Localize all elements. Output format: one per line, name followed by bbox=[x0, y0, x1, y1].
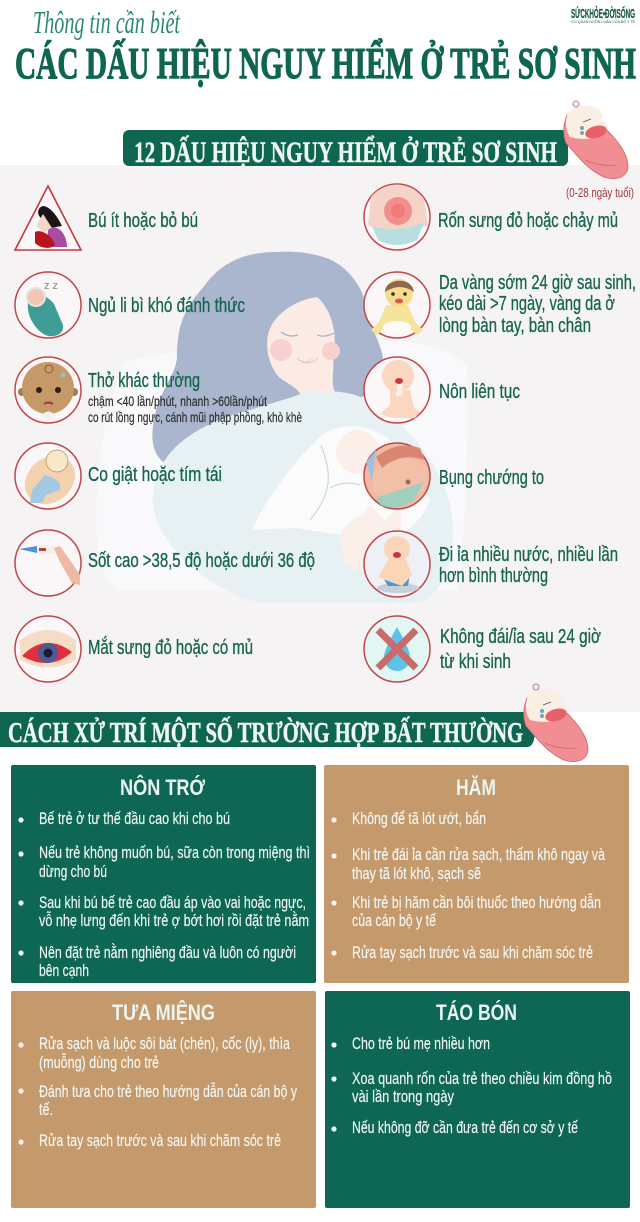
sign 12: no urine bbox=[364, 616, 601, 682]
label: từ khi sinh bbox=[440, 651, 511, 673]
label: Sốt cao >38,5 độ hoặc dưới 36 độ bbox=[88, 550, 315, 572]
logo: Sức khỏe & Đời sống: CƠ QUAN NGÔN LUẬN CỦA BỘ Y TẾ bbox=[571, 19, 635, 24]
sign 1: feeding bbox=[15, 186, 198, 250]
bullets bbox=[18, 1042, 24, 1145]
bullets bbox=[331, 1042, 337, 1132]
heading: TÁO BÓN bbox=[436, 1000, 517, 1025]
label: Thở khác thường bbox=[88, 370, 200, 392]
item text: thay tã lót khô, sạch sẽ bbox=[352, 864, 481, 883]
item text: dừng cho bú bbox=[39, 862, 107, 881]
sign 5: fever bbox=[15, 530, 315, 596]
item text: Nên đặt trẻ nằm nghiêng đầu và luôn có người bbox=[39, 943, 296, 962]
label: Bú ít hoặc bỏ bú bbox=[88, 210, 198, 232]
panel: Nôn trớ bbox=[11, 765, 316, 983]
sign 11: diarrhea bbox=[364, 531, 618, 597]
sign 3: abnormal breathing bbox=[15, 357, 302, 425]
panel: Hăm bbox=[324, 765, 629, 983]
item text: vỗ nhẹ lưng đến khi trẻ ợ bớt hơi rồi đặt trẻ nằm bbox=[39, 911, 309, 930]
sign 4: convulsion bbox=[15, 443, 222, 514]
item text bbox=[352, 809, 605, 962]
item text: Đánh tưa cho trẻ theo hướng dẫn của cán bộ y bbox=[39, 1082, 297, 1101]
icon: swaddled crying baby bbox=[564, 101, 628, 179]
item text: của cán bộ y tế bbox=[352, 911, 436, 930]
heading: NÔN TRỚ bbox=[120, 775, 205, 800]
item text: Cho trẻ bú mẹ nhiều hơn bbox=[352, 1034, 490, 1053]
item text: (muỗng) dùng cho trẻ bbox=[39, 1053, 159, 1072]
sign 7: navel bbox=[364, 184, 618, 250]
item text bbox=[352, 1034, 612, 1137]
sign 2: lethargic sleep: z z bbox=[44, 280, 58, 292]
bullets bbox=[331, 817, 337, 956]
item text: Rửa tay sạch trước và sau khi chăm sóc trẻ bbox=[39, 1131, 281, 1150]
label: Mắt sưng đỏ hoặc có mủ bbox=[88, 636, 253, 659]
icon: swaddled crying baby, lower bbox=[524, 684, 588, 762]
label: Bụng chướng to bbox=[439, 467, 544, 489]
item text: tế. bbox=[39, 1100, 53, 1119]
label: hơn bình thường bbox=[439, 565, 548, 587]
sign 2: lethargic sleep bbox=[15, 272, 245, 338]
label: Ngủ li bì khó đánh thức bbox=[88, 295, 245, 317]
sign 10: bloated belly bbox=[364, 443, 544, 509]
item text: bên cạnh bbox=[39, 961, 89, 980]
heading: HĂM bbox=[456, 775, 496, 800]
item text: vài lần trong ngày bbox=[352, 1087, 454, 1106]
detail: chậm <40 lần/phút, nhanh >60lần/phút bbox=[88, 393, 267, 409]
label: lòng bàn tay, bàn chân bbox=[439, 315, 591, 337]
heading: TƯA MIỆNG bbox=[112, 1000, 215, 1025]
sign 8: jaundice bbox=[364, 272, 636, 338]
subtitle: Thông tin cần biết: Thông tin cần biết bbox=[33, 4, 181, 40]
sign 6: red eye bbox=[15, 616, 253, 682]
item text bbox=[39, 809, 310, 980]
bullets bbox=[18, 817, 24, 956]
panel: Táo bón bbox=[325, 991, 630, 1208]
item text: Không để tã lót ướt, bẩn bbox=[352, 809, 486, 828]
item text: Rửa sạch và luộc sôi bát (chén), cốc (ly), thìa bbox=[39, 1034, 290, 1053]
panel: Tưa miệng bbox=[11, 991, 316, 1208]
label: Nôn liên tục bbox=[439, 381, 520, 403]
sign 9: vomiting bbox=[364, 357, 520, 423]
illustration: mother holding baby bbox=[96, 252, 468, 603]
item text: Sau khi bú bế trẻ cao đầu áp vào vai hoặc ngực, bbox=[39, 893, 306, 912]
item text: Bế trẻ ở tư thế đầu cao khi cho bú bbox=[39, 809, 230, 828]
detail: co rút lồng ngực, cánh mũi phập phồng, khò khè bbox=[88, 409, 302, 425]
label: Co giật hoặc tím tái bbox=[88, 464, 222, 486]
item text: Nếu trẻ không muốn bú, sữa còn trong miệng thì bbox=[39, 843, 310, 862]
item text bbox=[39, 1034, 297, 1150]
